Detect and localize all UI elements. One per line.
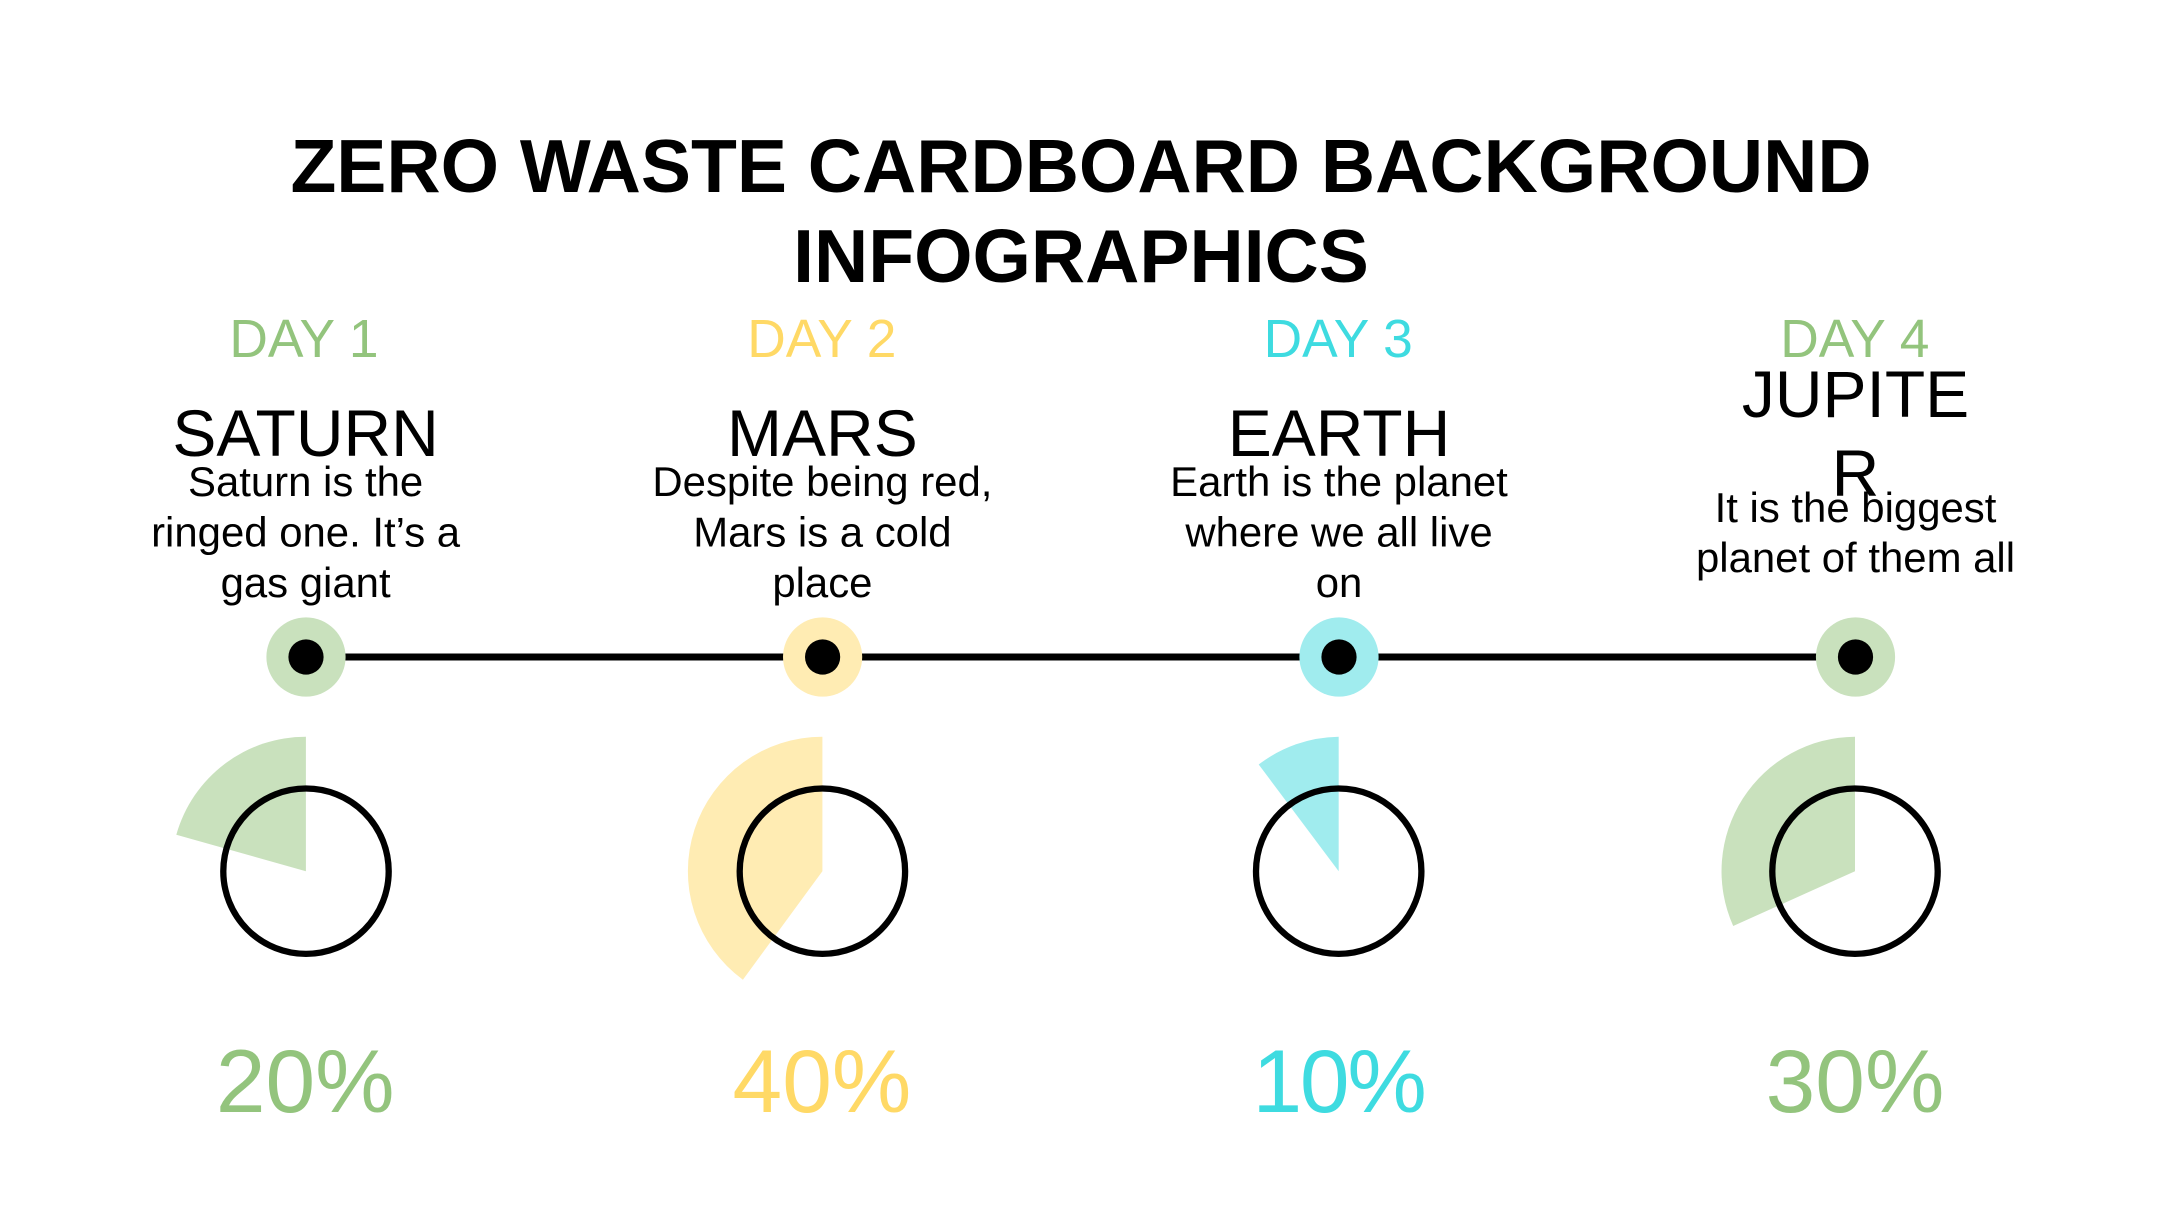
day 2 label: DAY 2 bbox=[747, 310, 896, 369]
earth description: Earth is the planet bbox=[1170, 458, 1508, 505]
earth description: where we all live bbox=[1184, 508, 1493, 556]
timeline marker 2 bbox=[783, 617, 862, 697]
pie chart 10% bbox=[1256, 737, 1421, 954]
timeline line bbox=[306, 654, 1856, 660]
percentage 10%: 10% bbox=[1252, 1031, 1425, 1131]
percentage 40%: 40% bbox=[733, 1031, 911, 1131]
day 4 label: DAY 4 bbox=[1780, 310, 1929, 369]
mars heading: MARS bbox=[727, 396, 918, 470]
pie chart 40% bbox=[688, 737, 905, 980]
timeline marker 1 bbox=[266, 617, 346, 697]
day 3 label: DAY 3 bbox=[1264, 310, 1413, 369]
panel: day 3 earth bbox=[1170, 310, 1508, 1131]
title: ZERO WASTE CARDBOARD BACKGROUND bbox=[290, 124, 1872, 208]
earth description bbox=[1170, 458, 1508, 606]
panel: day 2 mars bbox=[652, 310, 992, 1131]
mars description: Despite being red, bbox=[652, 458, 992, 505]
saturn description: Saturn is the bbox=[188, 458, 423, 505]
day 1 label: DAY 1 bbox=[229, 310, 379, 369]
jupiter description: planet of them all bbox=[1696, 534, 2015, 581]
earth heading: EARTH bbox=[1228, 396, 1450, 470]
timeline marker 4 bbox=[1816, 617, 1895, 697]
jupiter heading: R bbox=[1832, 436, 1879, 510]
percentage 20%: 20% bbox=[216, 1031, 395, 1131]
jupiter heading: JUPITE bbox=[1742, 357, 1969, 431]
mars description: place bbox=[772, 559, 872, 606]
title bbox=[290, 124, 1872, 298]
mars description bbox=[652, 458, 992, 606]
saturn description: gas giant bbox=[221, 559, 391, 606]
jupiter description: It is the biggest bbox=[1715, 484, 1997, 531]
saturn description bbox=[151, 458, 461, 606]
saturn description: ringed one. It’s a bbox=[151, 508, 461, 556]
mars description: Mars is a cold bbox=[693, 508, 952, 556]
pie chart 20% bbox=[176, 737, 389, 954]
percentage 30%: 30% bbox=[1766, 1031, 1944, 1131]
earth description: on bbox=[1316, 559, 1362, 606]
panel: day 4 jupiter bbox=[1696, 310, 2015, 1131]
title: INFOGRAPHICS bbox=[793, 214, 1369, 298]
jupiter heading bbox=[1742, 357, 1969, 510]
pie chart 30% bbox=[1722, 737, 1938, 954]
jupiter description bbox=[1696, 484, 2015, 581]
panel: day 1 saturn bbox=[151, 310, 461, 1131]
saturn heading: SATURN bbox=[172, 396, 439, 470]
timeline marker 3 bbox=[1299, 617, 1379, 697]
